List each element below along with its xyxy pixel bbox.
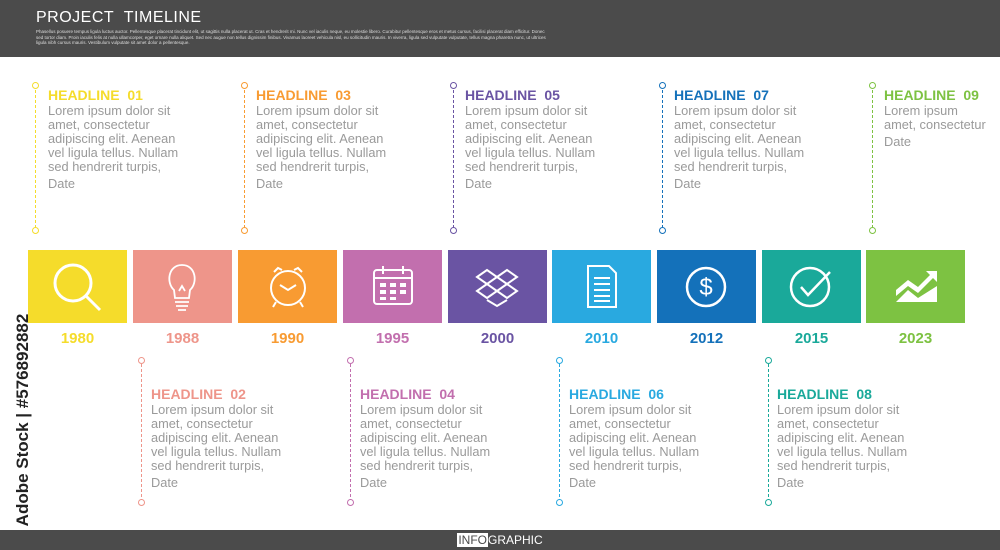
item 06 [569, 386, 699, 490]
item 03: vel ligula tellus. Nullam [256, 145, 386, 160]
item 07: adipiscing elit. Aenean [674, 131, 801, 146]
item 05: sed hendrerit turpis, [465, 159, 578, 174]
item 02: HEADLINE 02 [151, 386, 246, 402]
item 08: HEADLINE 08 [777, 386, 872, 402]
icon box: dollar 2012: $ [699, 274, 713, 301]
item 05: Date [465, 176, 492, 191]
item 07: amet, consectetur [674, 117, 776, 132]
item 09: Date [884, 134, 911, 149]
item 05: adipiscing elit. Aenean [465, 131, 592, 146]
item 08: adipiscing elit. Aenean [777, 430, 904, 445]
header: PROJECT TIMELINE [36, 9, 202, 26]
item 06: sed hendrerit turpis, [569, 458, 682, 473]
header: Phasellus posuere tempus ligula luctus auctor. Pellentesque placerat tincidunt elit, ut sagittis nulla placerat ut. Cras et hendrerit mi. Nunc vel iaculis neque, eu molestie libero. Curabitur pellentesque eros et metus cursus, facilisi placerat diam efficitur. Donec sed tortor diam. Proin iaculis felis at nulla ullamcorper, eget ornare nulla aliquet. Sed nec augue non tellus dignissim finibus. Vivamus laoreet vehicula nisl, eu sollicitudin mauris. In viverra, ligula sed vulputate vulputate, tellus magna pharetra nunc, ut ultrices ligula nibh cursus mauris. Vestibulum vulputate sit amet dolor a pellentesque. [36, 29, 546, 45]
item 08: Lorem ipsum dolor sit [777, 402, 899, 417]
item 05 [465, 87, 595, 191]
item 03: adipiscing elit. Aenean [256, 131, 383, 146]
item 07: Date [674, 176, 701, 191]
item 01: vel ligula tellus. Nullam [48, 145, 178, 160]
icon box: calendar 1995 [343, 250, 442, 323]
footer: INFOGRAPHIC [458, 533, 543, 547]
item 03: HEADLINE 03 [256, 87, 351, 103]
item 05: amet, consectetur [465, 117, 567, 132]
item 03: amet, consectetur [256, 117, 358, 132]
item 05: vel ligula tellus. Nullam [465, 145, 595, 160]
item 09: HEADLINE 09 [884, 87, 979, 103]
item 06: HEADLINE 06 [569, 386, 664, 402]
item 02 [151, 386, 281, 490]
item 04: amet, consectetur [360, 416, 462, 431]
icon box: clock 1990 [238, 250, 337, 323]
item 05: HEADLINE 05 [465, 87, 560, 103]
connector lines top [35, 90, 36, 228]
item 02: amet, consectetur [151, 416, 253, 431]
text: 2023 [899, 330, 932, 347]
item 04: Date [360, 475, 387, 490]
icon box: bulb 1988 [133, 250, 232, 323]
icon box: document 2010 [552, 250, 651, 323]
item 06: vel ligula tellus. Nullam [569, 444, 699, 459]
item 03: Date [256, 176, 283, 191]
item 04: sed hendrerit turpis, [360, 458, 473, 473]
item 07: vel ligula tellus. Nullam [674, 145, 804, 160]
text: 1988 [166, 330, 199, 347]
text: 1995 [376, 330, 409, 347]
item 03: sed hendrerit turpis, [256, 159, 369, 174]
item 06: Lorem ipsum dolor sit [569, 402, 691, 417]
item 04 [360, 386, 490, 490]
text: 2000 [481, 330, 514, 347]
item 06: Date [569, 475, 596, 490]
item 01: amet, consectetur [48, 117, 150, 132]
item 02: sed hendrerit turpis, [151, 458, 264, 473]
item 03: Lorem ipsum dolor sit [256, 103, 378, 118]
header [0, 0, 1000, 57]
years: 1980 [61, 330, 94, 347]
icon box: dropbox 2000 [448, 250, 547, 323]
item 05: Lorem ipsum dolor sit [465, 103, 587, 118]
icon box: search 1980 [28, 250, 127, 323]
item 04: vel ligula tellus. Nullam [360, 444, 490, 459]
item 06: adipiscing elit. Aenean [569, 430, 696, 445]
item 09 [884, 87, 986, 149]
icon box: growth chart 2023 [866, 250, 965, 323]
text: 2015 [795, 330, 828, 347]
item 01: Lorem ipsum dolor sit [48, 103, 170, 118]
item 01: HEADLINE 01 [48, 87, 143, 103]
item 04: HEADLINE 04 [360, 386, 455, 402]
item 07 [674, 87, 804, 191]
item 07: HEADLINE 07 [674, 87, 769, 103]
item 08: amet, consectetur [777, 416, 879, 431]
item 07: sed hendrerit turpis, [674, 159, 787, 174]
connector lines bottom [141, 364, 142, 502]
item 09: amet, consectetur [884, 117, 986, 132]
item 01 [48, 87, 178, 191]
item 04: adipiscing elit. Aenean [360, 430, 487, 445]
item 02: Lorem ipsum dolor sit [151, 402, 273, 417]
footer [0, 530, 1000, 550]
item 01: Date [48, 176, 75, 191]
watermark vertical text: Adobe Stock | #576892882 [13, 314, 32, 526]
item 06: amet, consectetur [569, 416, 671, 431]
item 02: adipiscing elit. Aenean [151, 430, 278, 445]
item 08: vel ligula tellus. Nullam [777, 444, 907, 459]
item 02: vel ligula tellus. Nullam [151, 444, 281, 459]
item 02: Date [151, 475, 178, 490]
item 08: Date [777, 475, 804, 490]
icon box: dollar 2012 [657, 250, 756, 323]
item 08 [777, 386, 907, 490]
text: 1990 [271, 330, 304, 347]
icon box: check 2015 [762, 250, 861, 323]
text: 2010 [585, 330, 618, 347]
text: 2012 [690, 330, 723, 347]
item 08: sed hendrerit turpis, [777, 458, 890, 473]
item 03 [256, 87, 386, 191]
item 01: adipiscing elit. Aenean [48, 131, 175, 146]
item 07: Lorem ipsum dolor sit [674, 103, 796, 118]
item 04: Lorem ipsum dolor sit [360, 402, 482, 417]
item 09: Lorem ipsum [884, 103, 958, 118]
item 01: sed hendrerit turpis, [48, 159, 161, 174]
